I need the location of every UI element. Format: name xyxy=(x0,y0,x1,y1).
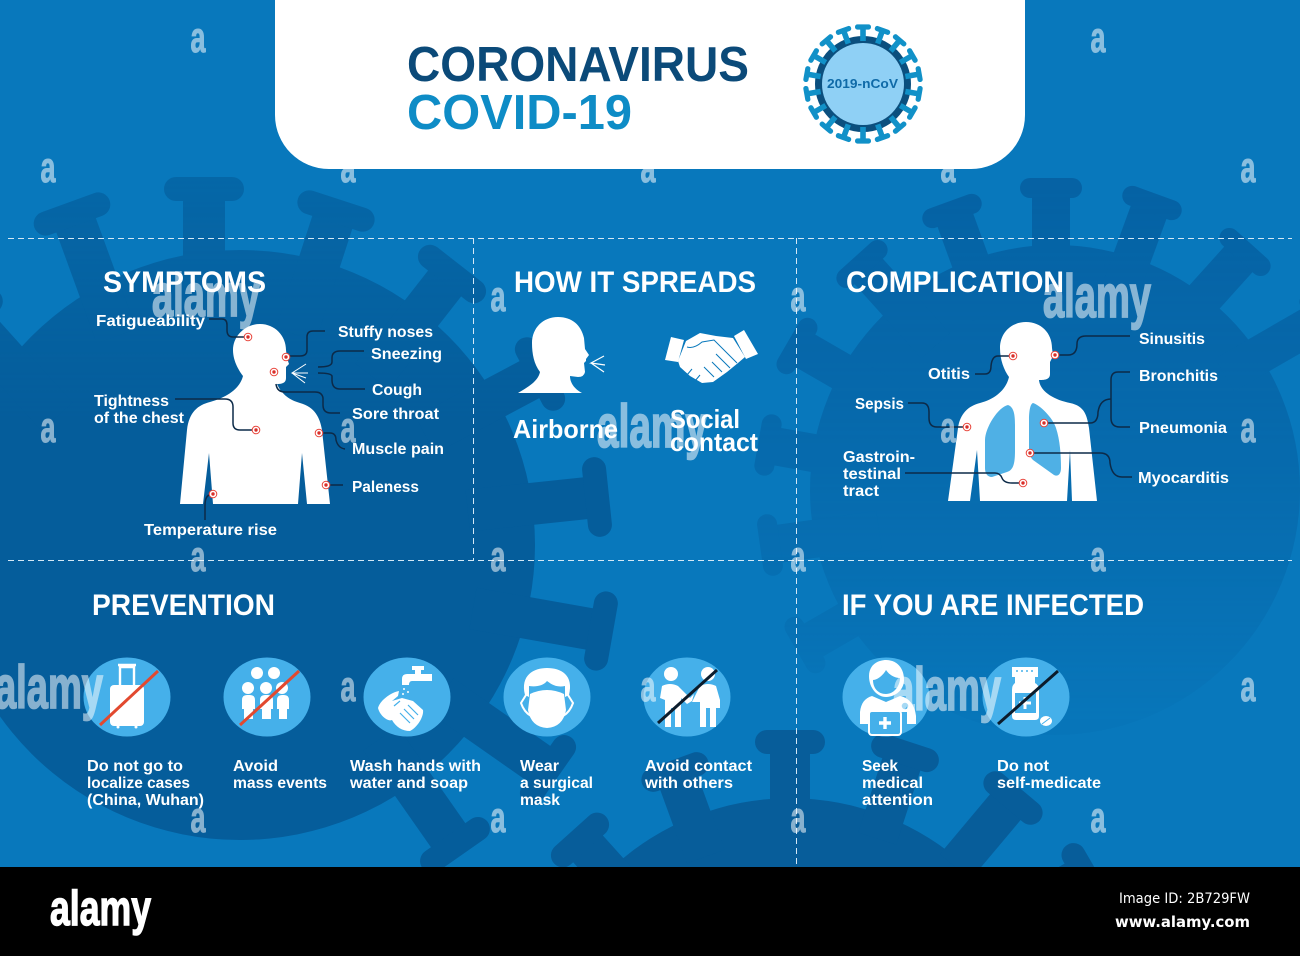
label: wash hands: Wash hands with xyxy=(350,758,481,775)
symptom labels: Temperature rise xyxy=(144,522,277,539)
label: wash hands: water and soap xyxy=(349,775,468,792)
watermark letters: a xyxy=(40,144,56,192)
watermark words xyxy=(0,262,1151,723)
label: do not go: (China, Wuhan) xyxy=(87,792,204,809)
watermark letters: a xyxy=(1240,663,1256,711)
label: avoid mass events: mass events xyxy=(233,775,327,792)
symptom labels: Sneezing xyxy=(371,346,442,363)
symptom labels xyxy=(94,313,444,539)
watermark letters: a xyxy=(1240,404,1256,452)
label: wear mask: Wear xyxy=(520,758,559,775)
label: avoid contact: Avoid contact xyxy=(645,758,753,775)
watermark letters: a xyxy=(340,663,356,711)
watermark letters: a xyxy=(490,794,506,842)
complication labels xyxy=(843,331,1229,500)
label: do not self-medicate: self-medicate xyxy=(997,775,1101,792)
watermark letters: a xyxy=(1240,144,1256,192)
icon: no travel luggage xyxy=(84,658,170,736)
body silhouette xyxy=(180,324,330,504)
label: seek medical attention: Seek xyxy=(862,758,898,775)
complication markers xyxy=(963,351,1059,487)
complication labels: Otitis xyxy=(928,366,970,383)
watermark letters: a xyxy=(790,273,806,321)
label: social contact: contact xyxy=(670,427,758,457)
watermark words: alamy xyxy=(597,393,707,460)
watermark letters: a xyxy=(1090,533,1106,581)
watermark letters: a xyxy=(640,144,656,192)
label: do not go: localize cases xyxy=(87,775,190,792)
icon: doctor xyxy=(842,658,930,736)
icon: avoid contact xyxy=(644,658,730,736)
icon: no self-medication xyxy=(982,658,1070,736)
watermark letters: a xyxy=(340,404,356,452)
watermark letters: a xyxy=(190,794,206,842)
footer logo: alamy xyxy=(50,882,151,936)
watermark letters: a xyxy=(940,144,956,192)
heading: prevention: PREVENTION xyxy=(92,589,275,622)
body silhouette xyxy=(948,322,1097,501)
footer bar xyxy=(0,867,1300,956)
watermark letters: a xyxy=(1090,14,1106,62)
symptom labels: Fatigueability xyxy=(96,313,205,330)
symptom labels: Tightness xyxy=(94,393,169,410)
label: airborne: Airborne xyxy=(513,414,618,444)
background virus: right xyxy=(754,178,1300,610)
watermark letters: a xyxy=(490,533,506,581)
panel: prevention xyxy=(84,589,753,809)
watermark letters: a xyxy=(640,663,656,711)
symptom labels: of the chest xyxy=(94,410,185,427)
watermark letters: a xyxy=(940,404,956,452)
symptom labels: Cough xyxy=(372,382,422,399)
icon: virus logo xyxy=(803,24,923,144)
symptom labels: Muscle pain xyxy=(352,441,444,458)
label: do not go: Do not go to xyxy=(87,758,183,775)
complication labels: Gastroin- xyxy=(843,449,915,466)
background virus: left xyxy=(0,177,620,878)
watermark letters: a xyxy=(490,273,506,321)
leader lines xyxy=(175,319,365,520)
complication labels: tract xyxy=(843,483,880,500)
watermark words: alamy xyxy=(152,262,260,329)
heading: complication: COMPLICATION xyxy=(846,266,1064,299)
watermark words: alamy xyxy=(1043,263,1151,330)
heading: how it spreads: HOW IT SPREADS xyxy=(514,266,756,299)
background virus: bottom xyxy=(546,730,1113,950)
icon: virus logo: 2019-nCoV xyxy=(827,76,898,91)
label: social contact: Social xyxy=(670,404,740,434)
icon: no mass events xyxy=(224,658,310,736)
heading: symptoms: SYMPTOMS xyxy=(103,266,266,299)
watermark letters: a xyxy=(40,404,56,452)
label: do not go xyxy=(87,758,204,809)
watermark letters: a xyxy=(190,14,206,62)
label: seek medical attention: medical xyxy=(862,775,923,792)
lungs xyxy=(985,403,1061,477)
breath lines xyxy=(292,364,308,383)
complication labels: Sinusitis xyxy=(1139,331,1205,348)
complication labels: Myocarditis xyxy=(1138,470,1229,487)
label: do not self-medicate: Do not xyxy=(997,758,1050,775)
icon: wash hands xyxy=(364,658,450,736)
header panel xyxy=(275,0,1025,169)
complication labels: Pneumonia xyxy=(1139,420,1227,437)
label: avoid contact xyxy=(644,758,753,792)
icon: handshake xyxy=(665,330,758,383)
label: wash hands xyxy=(349,758,481,792)
label: avoid mass events xyxy=(233,758,327,792)
watermark letters: a xyxy=(1090,794,1106,842)
leader lines xyxy=(905,336,1132,483)
watermark letters: a xyxy=(790,533,806,581)
watermark letters: a xyxy=(190,533,206,581)
watermark letters: a xyxy=(790,794,806,842)
label: wear mask xyxy=(520,758,593,809)
title: covid-19: COVID-19 xyxy=(407,86,632,140)
symptom labels: Sore throat xyxy=(352,406,440,423)
complication labels: testinal xyxy=(843,466,901,483)
label: do not self-medicate xyxy=(997,758,1101,792)
watermark words: alamy xyxy=(893,656,1001,723)
title: coronavirus: CORONAVIRUS xyxy=(407,38,749,92)
image id: Image ID: 2B729FW xyxy=(1119,891,1250,907)
panel: how it spreads xyxy=(513,266,758,457)
label: seek medical attention xyxy=(862,758,933,809)
watermark letters: a xyxy=(340,144,356,192)
label: avoid mass events: Avoid xyxy=(233,758,278,775)
icon: surgical mask xyxy=(504,658,590,736)
label: social contact xyxy=(670,404,758,457)
complication labels: Sepsis xyxy=(855,396,904,413)
website: www.alamy.com xyxy=(1115,913,1250,931)
symptom labels: Stuffy noses xyxy=(338,324,433,341)
panel: if you are infected xyxy=(842,589,1144,809)
label: wear mask: mask xyxy=(520,792,560,809)
panel: symptoms xyxy=(94,266,444,539)
symptom markers xyxy=(209,333,330,498)
symptom labels: Paleness xyxy=(352,479,419,496)
label: seek medical attention: attention xyxy=(862,792,933,809)
label: avoid contact: with others xyxy=(644,775,733,792)
heading: if you are infected: IF YOU ARE INFECTED xyxy=(842,589,1144,622)
watermark words: alamy xyxy=(0,654,103,721)
label: wear mask: a surgical xyxy=(520,775,593,792)
complication labels: Bronchitis xyxy=(1139,368,1218,385)
panel: complication xyxy=(843,266,1229,501)
icon: airborne head xyxy=(518,317,605,393)
